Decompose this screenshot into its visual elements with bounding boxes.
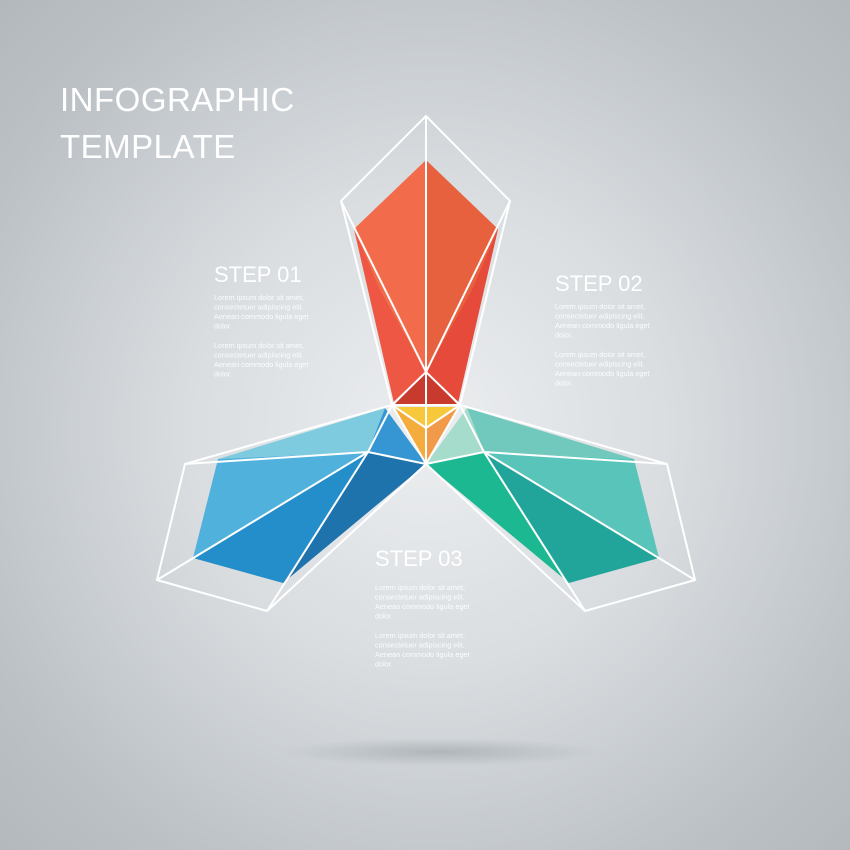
step 03 text: consectetuer adipiscing elit. [375,592,465,602]
step 01 text: dolor. [214,370,232,378]
step 01 text [214,262,309,378]
step 03 text: STEP 03 [375,546,463,571]
step 01 text: dolor. [214,322,232,330]
step 03 text: Lorem ipsum dolor sit amet, [375,631,465,640]
title [60,81,295,165]
shadow [280,738,600,766]
center triangle [394,407,458,464]
step 02 text: consectetuer adipiscing elit. [555,312,645,320]
red arm [354,160,498,405]
step 02 text: dolor. [555,330,573,340]
blue arm [193,408,426,583]
step 02 text: Lorem ipsum dolor sit amet, [555,350,645,359]
step 02 text [555,271,650,388]
step 02 text: Aenean commodo ligula eget [555,369,650,378]
step 03 text: Lorem ipsum dolor sit amet, [375,583,465,592]
step 02 text: Lorem ipsum dolor sit amet, [555,302,645,311]
step 01 text: Aenean commodo ligula eget [214,312,309,321]
green arm [426,408,659,583]
step 01 text: STEP 01 [214,262,302,287]
step 02 text: consectetuer adipiscing elit. [555,360,645,368]
step 01 text: consectetuer adipiscing elit. [214,350,304,360]
title: INFOGRAPHIC [60,81,295,118]
step 02 text: STEP 02 [555,271,643,296]
step 03 text: Aenean commodo ligula eget [375,602,470,611]
step 02 text: Aenean commodo ligula eget [555,321,650,330]
step 01 text: Lorem ipsum dolor sit amet, [214,293,304,302]
step 03 text: dolor. [375,612,393,620]
step 02 text: dolor. [555,378,573,388]
title: TEMPLATE [60,128,236,165]
wireframe outline [157,116,695,611]
step 01 text: Lorem ipsum dolor sit amet, [214,341,304,350]
step 03 text: consectetuer adipiscing elit. [375,640,465,650]
step 03 text: dolor. [375,660,393,668]
step 01 text: consectetuer adipiscing elit. [214,302,304,312]
step 03 text: Aenean commodo ligula eget [375,650,470,659]
step 01 text: Aenean commodo ligula eget [214,360,309,369]
step 03 text [375,546,470,668]
